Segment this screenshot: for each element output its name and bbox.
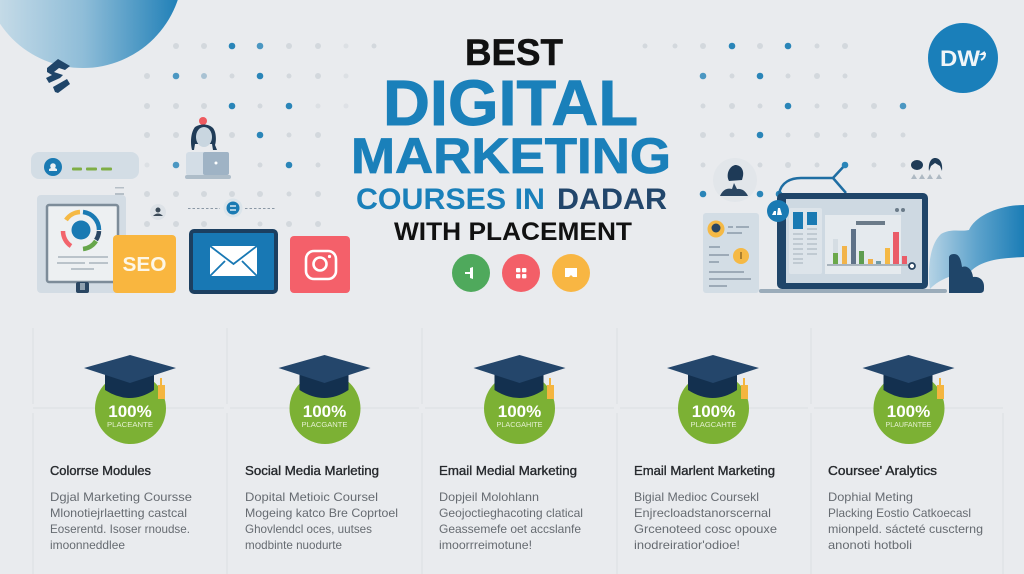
- panel: email marlent marketing: [634, 355, 777, 552]
- badge: graduation cap 100%: [667, 355, 759, 444]
- panel: course analytics: anonoti hotboli: [828, 538, 912, 552]
- network connector: [779, 162, 848, 194]
- icon row: three coloured circles: [452, 254, 590, 292]
- panel: social media marketing: Mogeing katco Bre Coprtoel: [245, 506, 398, 520]
- panel: email medial marketing: Geassemefe oet accslanfe: [439, 522, 581, 536]
- panel: social media marketing: Ghovlendcl oces, uutses: [245, 522, 372, 536]
- title: DADAR: [557, 183, 667, 216]
- panel: course modules: Mlonotiejrlaetting castcal: [50, 506, 187, 520]
- dark cloud: [949, 254, 984, 293]
- title: COURSES IN: [356, 183, 545, 216]
- panel: email marlent marketing: inodreiratior'odioe!: [634, 538, 740, 552]
- instagram tile: [290, 236, 350, 293]
- panel: course analytics: Dophial Meting: [828, 490, 913, 504]
- panel: course analytics: Placking Eostio Catkoecasl: [828, 506, 971, 520]
- dot grid left: [144, 43, 678, 227]
- panel: course modules: Colorrse Modules: [50, 464, 151, 478]
- panel: course analytics: [828, 355, 983, 552]
- panel: course modules: Eoserentd. Isoser rnoudse.: [50, 522, 190, 536]
- badge: graduation cap 100%: PLACEANTE: [107, 420, 153, 429]
- badge: graduation cap 100%: 100%: [108, 402, 152, 421]
- small user connector: [150, 198, 276, 220]
- badge: graduation cap 100%: 100%: [692, 402, 735, 421]
- panel: email medial marketing: imoorrreimotune!: [439, 538, 532, 552]
- badge: graduation cap 100%: [84, 355, 176, 444]
- badge: graduation cap 100%: [474, 355, 566, 444]
- title: BEST: [465, 32, 563, 73]
- DW logo: DW: [940, 46, 980, 71]
- badge: graduation cap 100%: PLAUFANTEE: [886, 420, 932, 429]
- title: WITH PLACEMENT: [394, 218, 632, 246]
- blue wave: [929, 205, 1024, 289]
- badge: graduation cap 100%: 100%: [887, 402, 930, 421]
- badge icon: [767, 200, 789, 222]
- title: [351, 32, 671, 246]
- dot grid right: [700, 43, 906, 197]
- panel: social media marketing: Social Media Marleting: [245, 464, 379, 478]
- panel: email medial marketing: Geojoctieghacoting clatical: [439, 506, 583, 520]
- panel: email medial marketing: Dopjeil Molohlann: [439, 490, 539, 504]
- panel: email marlent marketing: Grcenoteed cosc opouxe: [634, 522, 777, 536]
- badge: graduation cap 100%: 100%: [498, 402, 541, 421]
- decorative circle top left: [0, 0, 183, 68]
- email tile: [191, 231, 276, 292]
- panel: email medial marketing: [439, 355, 583, 552]
- panel: course analytics: mionpeld. sácteté cuscterng: [828, 522, 983, 536]
- DW logo: [928, 23, 998, 93]
- badge: graduation cap 100%: PLACGANTE: [302, 420, 348, 429]
- tablet with donut chart: [37, 187, 126, 293]
- panel: course analytics: Coursee' Aralytics: [828, 464, 937, 478]
- profile card: [703, 213, 759, 293]
- SEO tile: SEO: [122, 254, 166, 276]
- panel: course modules: [50, 355, 192, 552]
- grid lines: [33, 328, 1003, 574]
- user pill: [31, 152, 139, 179]
- panel: email marlent marketing: Bigial Medioc Coursekl: [634, 490, 759, 504]
- woman with laptop: [185, 117, 231, 179]
- panel: email marlent marketing: Email Marlent Marketing: [634, 464, 775, 478]
- badge: graduation cap 100%: [278, 355, 370, 444]
- two heads icon: [911, 158, 942, 179]
- badge: graduation cap 100%: PLACGAHITE: [496, 420, 542, 429]
- portrait circle: [713, 158, 757, 202]
- panel: course modules: Dgjal Marketing Coursse: [50, 490, 192, 504]
- panel: email marlent marketing: Enjrecloadstanorscernal: [634, 506, 771, 520]
- title: MARKETING: [351, 128, 671, 184]
- title: DIGITAL: [383, 67, 638, 139]
- SEO tile: [113, 235, 176, 293]
- badge: graduation cap 100%: [862, 355, 954, 444]
- icon: arrows logo: [46, 59, 70, 93]
- panel: course modules: imoonneddlee: [50, 538, 125, 552]
- badge: graduation cap 100%: 100%: [303, 402, 346, 421]
- badge: graduation cap 100%: PLAGCAHTE: [690, 420, 736, 429]
- panel: social media marketing: [245, 355, 398, 552]
- panel: social media marketing: modbinte nuodurte: [245, 538, 342, 552]
- panel: email medial marketing: Email Medial Marketing: [439, 464, 577, 478]
- panel: social media marketing: Dopital Metioic Coursel: [245, 490, 378, 504]
- laptop with bar chart: [759, 193, 947, 293]
